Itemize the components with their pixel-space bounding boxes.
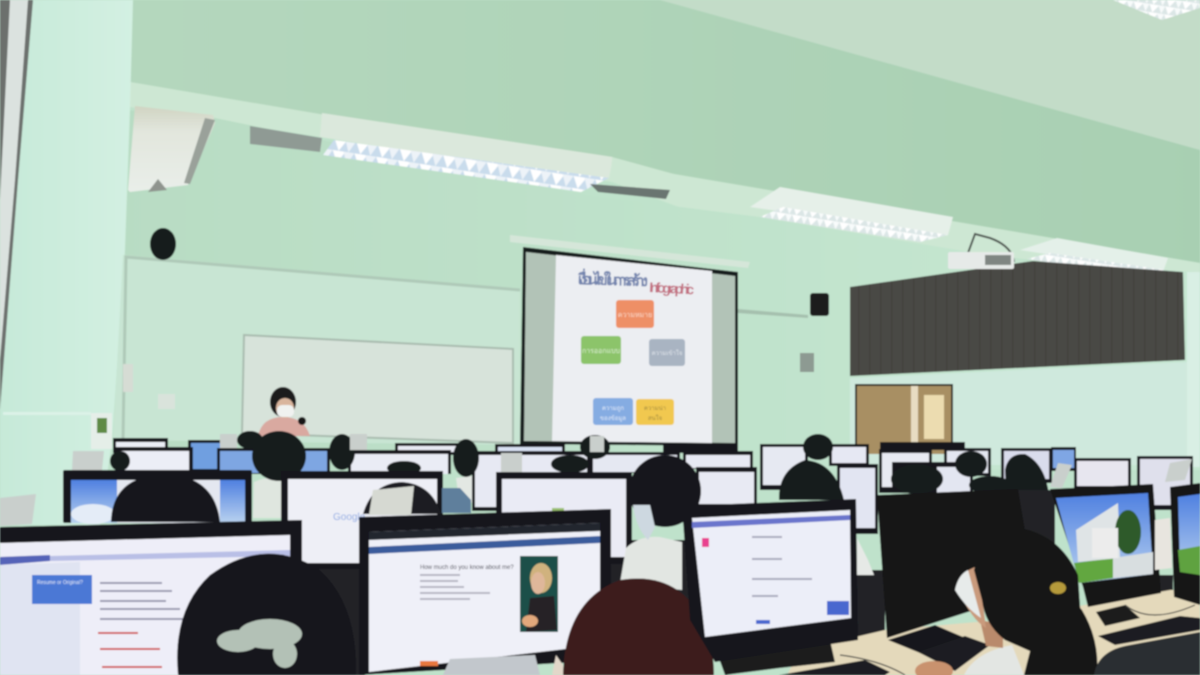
student scrunchie head	[177, 554, 356, 675]
student brown hair front	[563, 578, 714, 675]
ceiling light right	[750, 187, 953, 242]
middle monitor	[496, 472, 632, 564]
air conditioner	[128, 106, 215, 192]
slide box blue: ของข้อมูล	[600, 415, 626, 422]
dialog box: Resume or Original?	[37, 580, 83, 586]
slide box grey: ความเข้าใจ	[652, 349, 682, 357]
ceiling light far right	[1020, 238, 1168, 275]
desk	[787, 590, 1200, 675]
monitor far right	[1170, 483, 1200, 605]
mask	[955, 570, 981, 618]
monitor stand center	[716, 640, 835, 675]
left blue monitor	[63, 470, 252, 524]
slide box yellow: ความน่า	[644, 405, 666, 412]
student shoulder front	[552, 655, 563, 675]
desk cables	[840, 605, 1195, 675]
face	[958, 566, 986, 628]
slide box yellow: สนใจ	[648, 414, 662, 422]
projector	[948, 234, 1014, 269]
quiz portrait	[520, 556, 558, 632]
ceiling light main	[320, 113, 613, 192]
projection screen housing	[510, 235, 750, 268]
speaker left	[150, 228, 176, 260]
dark rows of monitor backs	[280, 490, 1173, 675]
front monitor chat	[682, 499, 858, 662]
hand	[915, 661, 953, 675]
left wall	[0, 0, 133, 525]
slide box yellow	[636, 399, 674, 425]
door	[855, 384, 953, 454]
front monitor far left	[0, 520, 302, 675]
projection screen	[520, 247, 738, 446]
google monitor: Google	[333, 512, 366, 523]
right wall	[850, 272, 1200, 467]
student blue shirt	[442, 488, 471, 513]
hair tie	[1050, 582, 1066, 594]
wall rail right of screen	[738, 309, 808, 318]
speaker right	[810, 293, 829, 316]
front monitor quiz	[359, 509, 611, 675]
second row monitors	[116, 447, 973, 534]
keyboards	[779, 616, 1200, 675]
slide box orange	[616, 300, 654, 328]
slide box blue: ความถูก	[602, 406, 624, 412]
slide box blue	[593, 398, 633, 425]
student dark hair left	[111, 474, 220, 522]
chair back	[1094, 632, 1200, 675]
black monitor	[877, 489, 1030, 655]
student right edge	[1155, 518, 1172, 570]
slide box orange: ความหมาย	[618, 312, 652, 319]
dark curtain	[850, 261, 1185, 376]
tablet	[443, 655, 540, 675]
neck	[980, 620, 1003, 648]
dialog box	[32, 575, 92, 604]
wall intercom panel	[91, 413, 112, 449]
slide box grey	[649, 339, 685, 366]
student with ponytail	[915, 528, 1097, 675]
slide title: เงื่อนไขในการสร้าง	[577, 268, 648, 290]
back row students	[110, 431, 1050, 530]
slide box green	[581, 336, 621, 364]
slide box green: การออกแบบ	[582, 348, 620, 355]
wall thermostat and switches	[123, 364, 175, 409]
lower back wall panel	[113, 255, 520, 445]
back row monitors	[113, 438, 1193, 510]
wall socket	[800, 353, 814, 372]
student with paper	[363, 482, 441, 515]
hair	[974, 528, 1081, 660]
scrunchie	[217, 619, 302, 668]
student shirt right	[857, 538, 874, 575]
third row students	[111, 455, 874, 590]
small ceiling light center	[590, 157, 750, 205]
front monitor quiz: How much do you know about me?	[420, 565, 514, 571]
paper sheets	[0, 434, 1192, 526]
ceiling light top corner	[1113, 0, 1200, 20]
student center with mask	[620, 455, 701, 590]
presenter	[258, 387, 310, 436]
whiteboard	[242, 335, 513, 443]
shirt	[964, 645, 1024, 675]
campus monitor	[1050, 484, 1161, 626]
slide title accent: Infographic	[649, 279, 695, 297]
third row monitors	[63, 470, 632, 569]
google monitor	[281, 471, 443, 569]
small ceiling light left	[250, 126, 322, 152]
ponytail	[1024, 594, 1097, 675]
